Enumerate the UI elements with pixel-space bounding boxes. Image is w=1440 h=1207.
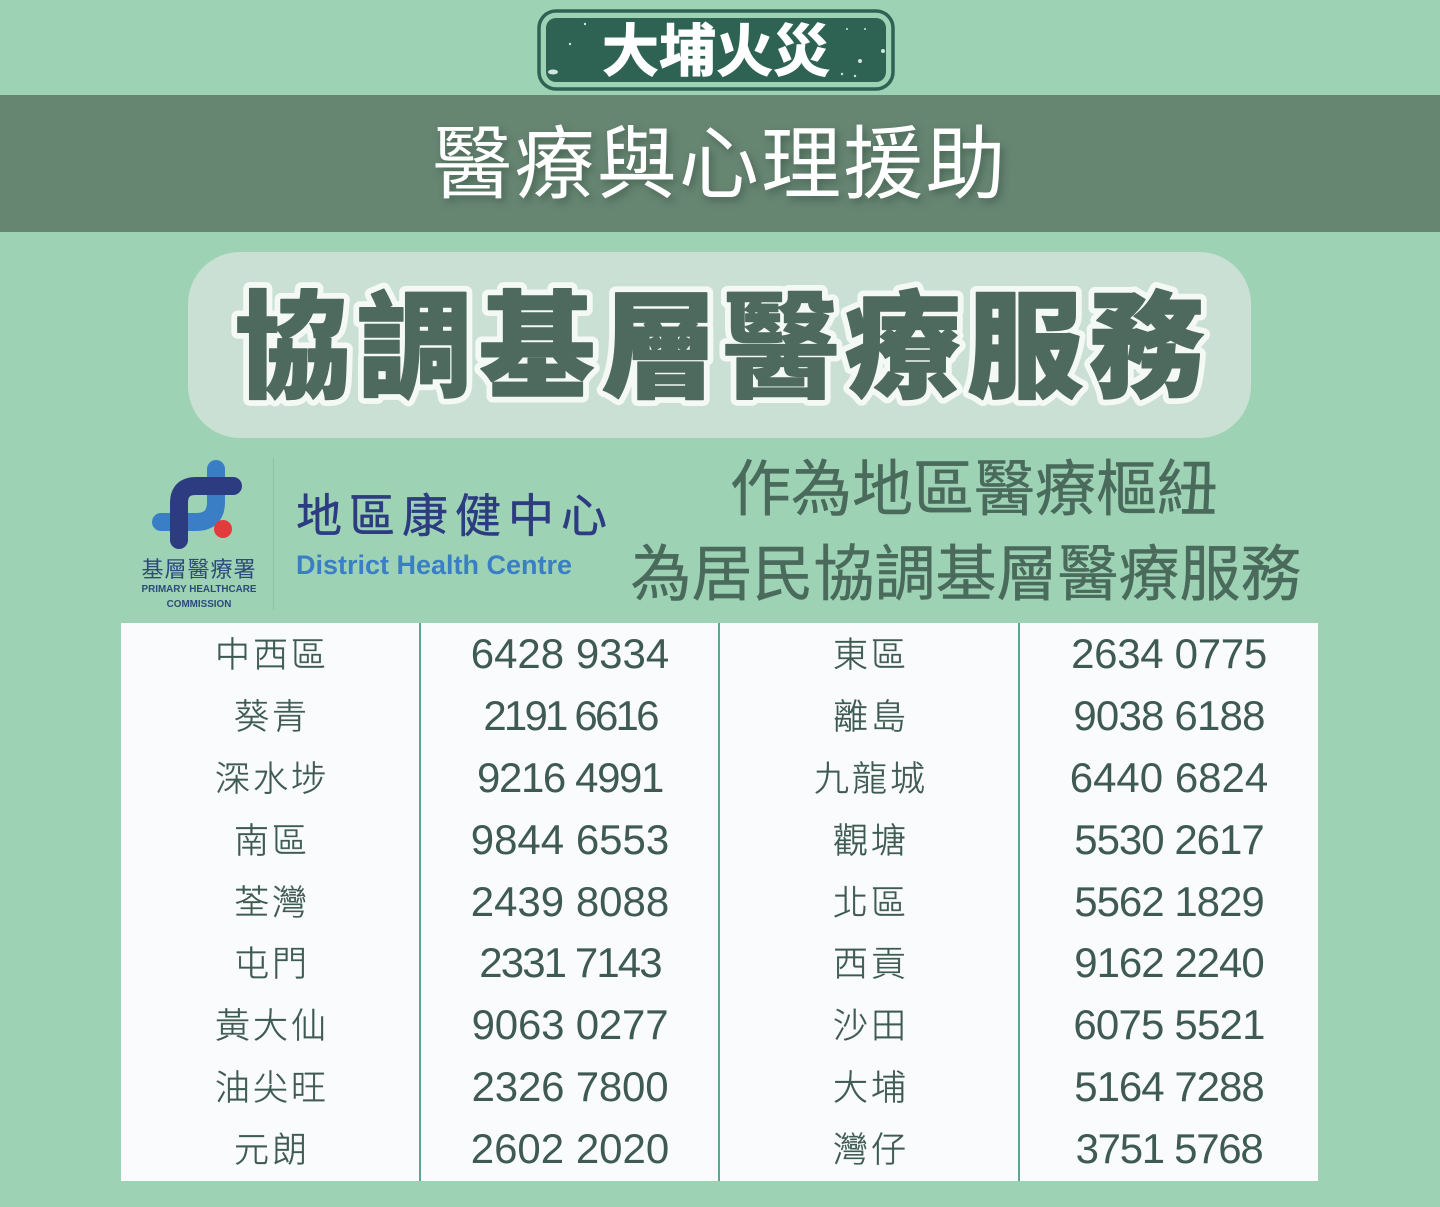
column: districts right: 離島 [833,698,909,737]
column: districts right: 沙田 [833,1007,909,1046]
column: districts right [814,636,928,1170]
logo English name [141,584,257,610]
column: phones right: 5164 7288 [1074,1063,1264,1110]
column: phones right: 6075 5521 [1073,1001,1265,1048]
column: phones right: 9038 6188 [1073,692,1265,739]
column: districts left: 油尖旺 [215,1069,329,1108]
subtitle line 1: 作為地區醫療樞紐 [730,455,1218,523]
column: phones left: 2191 6616 [483,692,657,739]
column: phones right [1070,630,1268,1172]
column: districts left: 深水埗 [215,760,329,799]
Chinese name: 地區康健中心 [296,490,614,542]
column: phones right: 5530 2617 [1074,816,1264,863]
column: districts left: 黃大仙 [215,1007,329,1046]
contact table [121,623,1318,1181]
column: phones left: 9216 4991 [477,754,663,801]
column: phones right: 6440 6824 [1070,754,1268,801]
badge: 大埔火災 [537,9,895,91]
column: districts right: 觀塘 [833,822,909,861]
column: phones right: 9162 2240 [1074,939,1264,986]
column: phones left: 9844 6553 [471,816,669,863]
column: districts left: 中西區 [215,636,329,675]
column: districts right: 九龍城 [814,760,928,799]
column: districts right: 東區 [833,636,909,675]
column: phones left [471,630,669,1172]
column: phones right: 2634 0775 [1071,630,1267,677]
column: districts left [215,636,329,1170]
pill: 協調基層醫療服務 [188,252,1251,438]
column: phones left: 6428 9334 [471,630,669,677]
column: districts right: 西貢 [833,945,909,984]
column: phones right: 3751 5768 [1076,1125,1262,1172]
pill title: 協調基層醫療服務 [235,283,1211,413]
column: districts left: 葵青 [234,698,310,737]
column: districts right: 北區 [833,884,909,923]
subtitle [630,455,1302,608]
column: districts right: 灣仔 [833,1131,909,1170]
column: phones left: 9063 0277 [472,1001,668,1048]
logo: Primary Healthcare Commission [141,460,257,610]
column: districts left: 元朗 [234,1131,310,1170]
header band [0,95,1440,232]
logo English name: COMMISSION [167,598,231,610]
logo Chinese name: 基層醫療署 [141,557,256,582]
logo mark [152,460,242,549]
column: districts right: 大埔 [833,1069,909,1108]
logo English name: PRIMARY HEALTHCARE [141,584,257,595]
column: districts left: 屯門 [234,945,310,984]
column: districts left: 荃灣 [234,884,310,923]
column: districts left: 南區 [234,822,310,861]
band title: 醫療與心理援助: 醫療與心理援助 [432,120,1008,209]
District Health Centre lockup [296,490,614,580]
English name: District Health Centre [296,550,572,580]
column: phones left: 2602 2020 [471,1125,669,1172]
pill title: 協調基層醫療服務 [235,283,1211,413]
subtitle line 2: 為居民協調基層醫療服務 [630,540,1302,608]
column: phones right: 5562 1829 [1074,878,1264,925]
column: phones left: 2439 8088 [471,878,669,925]
column: phones left: 2326 7800 [472,1063,668,1110]
column: phones left: 2331 7143 [479,939,661,986]
badge: 大埔火災: 大埔火災 [602,20,830,84]
